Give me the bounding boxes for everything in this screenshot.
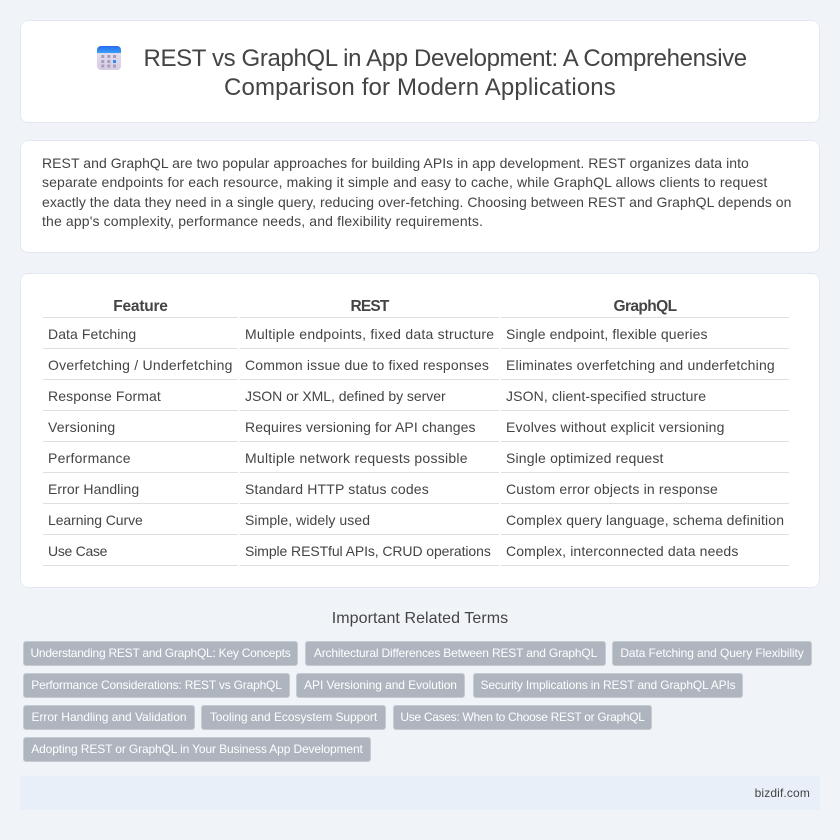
row: Learning Curve: Learning Curve bbox=[48, 512, 143, 528]
tag bbox=[23, 737, 371, 762]
row: Error Handling: Standard HTTP status codes bbox=[245, 481, 429, 497]
tag: Security Implications in REST and GraphQL APIs bbox=[480, 678, 736, 692]
tag bbox=[23, 705, 195, 730]
title: REST vs GraphQL in App Development: A Comprehensive bbox=[144, 45, 747, 72]
tag: Adopting REST or GraphQL in Your Business App Development bbox=[31, 742, 363, 756]
row: Error Handling: Error Handling bbox=[48, 481, 139, 497]
row: Versioning bbox=[48, 419, 725, 435]
icon: calendar bbox=[97, 46, 121, 70]
row: Versioning: Versioning bbox=[48, 419, 115, 435]
row: Use Case bbox=[48, 543, 738, 559]
row: Overfetching: Overfetching / Underfetching bbox=[48, 357, 233, 373]
tag bbox=[393, 705, 652, 730]
footer bar bbox=[20, 776, 820, 810]
related terms heading: Important Related Terms bbox=[332, 610, 508, 627]
row: Overfetching: Common issue due to fixed responses bbox=[245, 357, 489, 373]
row: Error Handling: Custom error objects in response bbox=[506, 481, 718, 497]
comparison table card bbox=[20, 273, 820, 588]
row: Versioning: Requires versioning for API changes bbox=[245, 419, 476, 435]
tag: Tooling and Ecosystem Support bbox=[210, 710, 377, 724]
tag: Performance Considerations: REST vs GraphQL bbox=[31, 678, 282, 692]
table header: REST: REST bbox=[351, 298, 388, 315]
footer site name: bizdif.com bbox=[755, 786, 810, 800]
row: Error Handling bbox=[48, 481, 718, 497]
tag bbox=[296, 673, 465, 698]
title: Comparison for Modern Applications bbox=[224, 74, 616, 101]
intro text card: the app's complexity, performance needs, and flexibility requirements. bbox=[42, 213, 483, 229]
tag: Architectural Differences Between REST and GraphQL bbox=[314, 646, 597, 660]
row: Versioning: Evolves without explicit versioning bbox=[506, 419, 725, 435]
row: Use Case: Simple RESTful APIs, CRUD operations bbox=[245, 543, 491, 559]
row: Performance: Multiple network requests possible bbox=[245, 450, 468, 466]
row: Use Case: Complex, interconnected data needs bbox=[506, 543, 738, 559]
row: Response Format: Response Format bbox=[48, 388, 161, 404]
tag bbox=[305, 641, 606, 666]
row: Response Format bbox=[48, 388, 706, 404]
row: Use Case: Use Case bbox=[48, 543, 107, 559]
row: Overfetching bbox=[48, 357, 775, 373]
row: Learning Curve: Complex query language, schema definition bbox=[506, 512, 784, 528]
intro text card bbox=[20, 140, 820, 253]
intro text card: separate endpoints for each resource, making it simple and easy to cache, while GraphQL allows clients to request bbox=[42, 174, 767, 190]
tag: Error Handling and Validation bbox=[31, 710, 186, 724]
tag bbox=[473, 673, 743, 698]
tag bbox=[23, 641, 298, 666]
table header: GraphQL: GraphQL bbox=[614, 298, 676, 315]
tag: Understanding REST and GraphQL: Key Concepts bbox=[30, 646, 291, 660]
row: Data Fetching: Single endpoint, flexible queries bbox=[506, 326, 708, 342]
row: Learning Curve bbox=[48, 512, 784, 528]
intro text card: REST and GraphQL are two popular approaches for building APIs in app development. REST organizes data into bbox=[42, 155, 749, 171]
row: Data Fetching: Multiple endpoints, fixed data structure bbox=[245, 326, 494, 342]
row: Performance: Single optimized request bbox=[506, 450, 664, 466]
tag bbox=[612, 641, 812, 666]
tag bbox=[201, 705, 386, 730]
row: Performance bbox=[48, 450, 664, 466]
related term tags bbox=[23, 641, 812, 762]
row: Learning Curve: Simple, widely used bbox=[245, 512, 370, 528]
tag bbox=[23, 673, 290, 698]
table header: Feature: Feature bbox=[113, 298, 168, 315]
tag: API Versioning and Evolution bbox=[304, 678, 457, 692]
header card bbox=[20, 20, 820, 123]
title bbox=[144, 45, 747, 101]
intro text card: exactly the data they need in a single query, reducing over-fetching. Choosing between REST and GraphQL depends on bbox=[42, 194, 791, 210]
row: Performance: Performance bbox=[48, 450, 131, 466]
row: Overfetching: Eliminates overfetching and underfetching bbox=[506, 357, 775, 373]
row: Data Fetching bbox=[48, 326, 708, 342]
row: Response Format: JSON or XML, defined by server bbox=[245, 388, 446, 404]
tag: Use Cases: When to Choose REST or GraphQL bbox=[400, 710, 645, 724]
row: Data Fetching: Data Fetching bbox=[48, 326, 136, 342]
tag: Data Fetching and Query Flexibility bbox=[620, 646, 804, 660]
row: Response Format: JSON, client-specified structure bbox=[506, 388, 706, 404]
